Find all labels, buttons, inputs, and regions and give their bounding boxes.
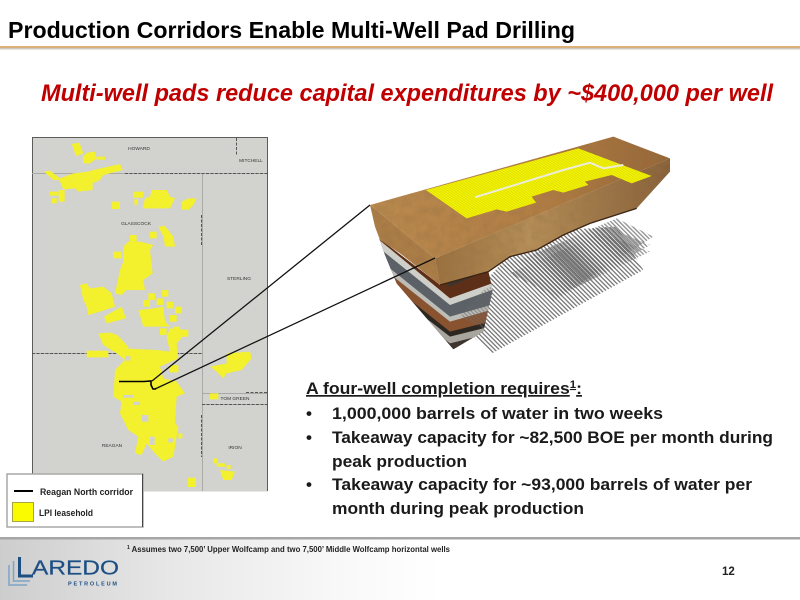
yellow leasehold north xyxy=(44,143,197,337)
legend xyxy=(7,474,143,527)
completion text block: • xyxy=(306,475,312,494)
completion text block: • xyxy=(306,404,312,423)
completion text block: • xyxy=(306,428,312,447)
block front face xyxy=(435,158,670,285)
completion text block: 1 xyxy=(570,379,576,391)
title: Production Corridors Enable Multi-Well Pad Drilling xyxy=(8,17,575,43)
production corridor xyxy=(475,163,623,197)
legend: leasehold: LPI leasehold xyxy=(39,508,93,518)
completion text block: month during peak production xyxy=(332,499,584,518)
county labels: REAGAN xyxy=(102,443,123,449)
logo: PETROLEUM xyxy=(68,582,117,588)
footer rule xyxy=(0,537,800,540)
completion text block: 1,000,000 barrels of water in two weeks xyxy=(332,404,663,423)
completion text block: A four-well completion requires xyxy=(306,379,560,398)
county labels xyxy=(102,146,263,451)
callout lines xyxy=(152,205,435,389)
county labels: GLASSCOCK xyxy=(121,221,152,227)
logo xyxy=(9,557,119,588)
county labels: HOWARD xyxy=(128,146,150,152)
title rule xyxy=(0,46,800,50)
footer band xyxy=(0,539,800,600)
logo mark xyxy=(9,561,30,585)
county labels: TOM GREEN xyxy=(221,396,250,402)
logo wordmark: AREDO xyxy=(32,558,119,580)
block lower edge xyxy=(440,208,637,285)
legend: corridor: Reagan North corridor xyxy=(40,487,133,497)
page number: 12 xyxy=(722,566,735,578)
horizontal well laterals xyxy=(473,218,653,353)
county labels: IRION xyxy=(228,445,242,451)
county labels: MITCHELL xyxy=(239,158,263,164)
corridor line xyxy=(119,381,156,389)
county labels: STERLING xyxy=(227,276,251,282)
block top face xyxy=(370,137,670,258)
completion text block: Takeaway capacity for ~93,000 barrels of water per xyxy=(332,475,752,494)
subtitle: Multi-well pads reduce capital expenditures by ~$400,000 per well xyxy=(41,80,774,107)
footnote: Assumes two 7,500’ Upper Wolfcamp and two 7,500’ Middle Wolfcamp horizontal wells xyxy=(130,544,450,554)
yellow pad acreage xyxy=(426,148,652,218)
completion text block xyxy=(306,379,773,518)
laterals seen through strata xyxy=(460,287,492,330)
completion text block: peak production xyxy=(332,452,467,471)
block left face xyxy=(370,205,440,285)
yellow leasehold south xyxy=(87,328,252,487)
completion text block: : xyxy=(576,379,582,398)
completion text block: Takeaway capacity for ~82,500 BOE per month during xyxy=(332,428,773,447)
footnote: 1 xyxy=(127,545,130,551)
map panel xyxy=(32,138,268,492)
3D block diagram xyxy=(370,137,670,353)
rock strata xyxy=(379,238,493,350)
